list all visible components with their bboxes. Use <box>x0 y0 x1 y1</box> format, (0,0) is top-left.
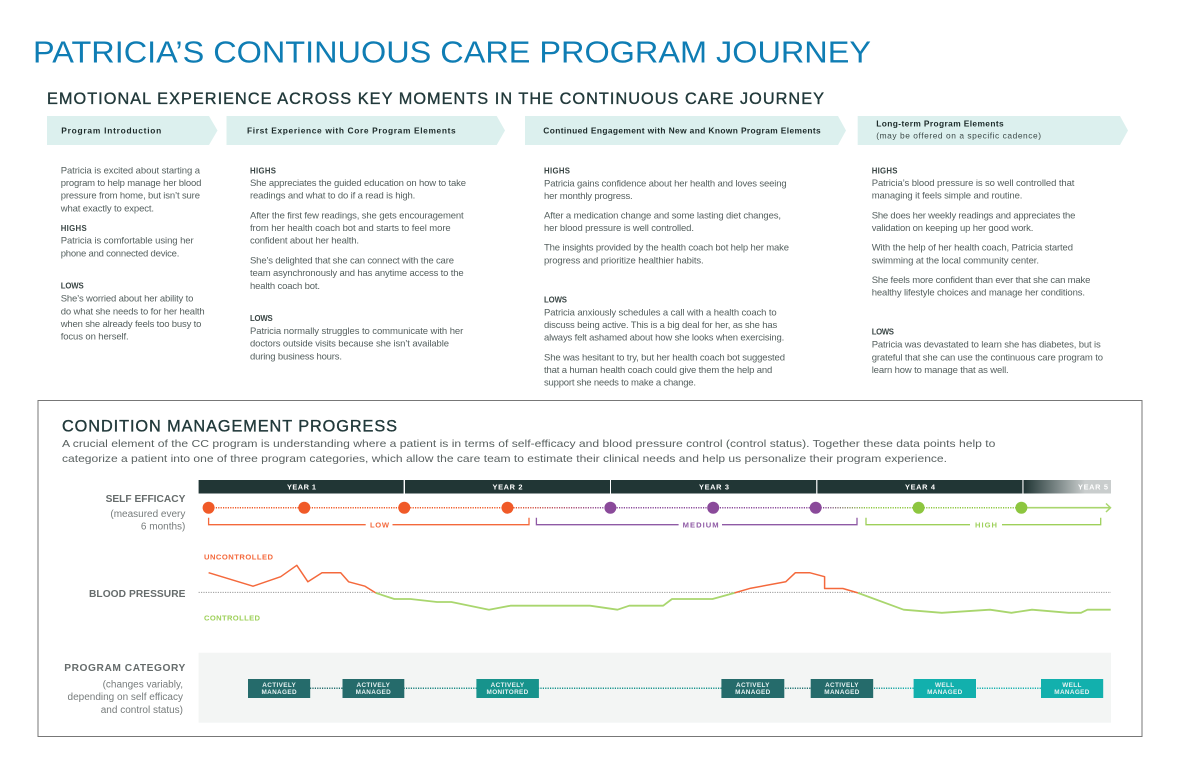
text column: long-term elements: managing it feels simple and routine. <box>872 191 1022 202</box>
panel description: categorize a patient into one of three program categories, which allow the care team to estimate their clinical needs and help us personalize their program experience. <box>62 454 947 465</box>
text column: long-term elements: She feels more confident than ever that she can make <box>872 275 1090 286</box>
text column: long-term elements: HIGHS <box>872 166 897 175</box>
box: well managed: MANAGED <box>1054 689 1090 696</box>
text column: long-term elements: She does her weekly readings and appreciates the <box>872 210 1075 221</box>
text column: continued engagement: The insights provided by the health coach bot help her make <box>544 243 789 254</box>
text column: continued engagement: her monthly progress. <box>544 191 633 202</box>
text column: long-term elements: healthy lifestyle choices and manage her conditions. <box>872 288 1085 299</box>
box: actively managed: ACTIVELY <box>825 682 859 689</box>
text column: program introduction: program to help manage her blood <box>61 178 201 189</box>
text column: long-term elements: learn how to manage that as well. <box>872 365 1009 376</box>
text column: first experience: readings and what to do if a read is high. <box>250 191 415 202</box>
text column: continued engagement: progress and prioritize healthier habits. <box>544 256 704 267</box>
text column: continued engagement: Patricia anxiously schedules a call with a health coach to <box>544 307 777 318</box>
text column: program introduction: pressure from home, but isn’t sure <box>61 191 200 202</box>
box: actively managed: MANAGED <box>824 689 860 696</box>
label: self efficacy <box>106 494 186 532</box>
text column: first experience: confident about her health. <box>250 236 359 247</box>
chevron: first experience: First Experience with Core Program Elements <box>247 125 456 135</box>
label: controlled: CONTROLLED <box>204 614 261 623</box>
box: actively managed: ACTIVELY <box>262 682 296 689</box>
box: actively managed: MANAGED <box>356 689 391 696</box>
text column: first experience: Patricia normally struggles to communicate with her <box>250 326 463 337</box>
text column: long-term elements: LOWS <box>872 328 894 337</box>
text column: program introduction: when she already feels too busy to <box>60 319 201 330</box>
text column: continued engagement: her blood pressure is well controlled. <box>544 223 694 234</box>
bracket: low: LOW <box>370 520 390 529</box>
text column: long-term elements: Patricia was devastated to learn she has diabetes, but is <box>872 340 1101 351</box>
chevron: continued engagement <box>525 116 846 145</box>
text column: program introduction: She’s worried about her ability to <box>61 294 193 305</box>
label: uncontrolled: UNCONTROLLED <box>204 553 274 562</box>
text column: continued engagement: that a human health coach could give them the help and <box>544 365 772 376</box>
section heading: emotional experience: EMOTIONAL EXPERIENCE ACROSS KEY MOMENTS IN THE CONTINUOUS CARE JOURNEY <box>47 90 824 108</box>
box: actively managed: MANAGED <box>261 689 297 696</box>
bracket: high <box>866 518 1101 529</box>
text column: continued engagement: HIGHS <box>544 166 570 175</box>
year timeline bar: YEAR 1 <box>287 483 316 492</box>
label: program category: PROGRAM CATEGORY <box>64 663 186 674</box>
box: actively managed: ACTIVELY <box>356 682 391 689</box>
blood pressure chart <box>199 553 1111 623</box>
box: actively managed: MANAGED <box>735 689 771 696</box>
chevron: long-term elements <box>858 116 1128 145</box>
text column: first experience: After the first few readings, she gets encouragement <box>250 210 464 221</box>
bracket: high: HIGH <box>975 520 997 529</box>
text column: first experience: doctors outside visits because she isn’t available <box>250 339 449 350</box>
text column: continued engagement: always felt ashamed about how she looks when exercising. <box>544 333 784 344</box>
bracket: medium <box>536 518 857 529</box>
text column: continued engagement: support she needs to make a change. <box>544 378 696 389</box>
box: actively managed: ACTIVELY <box>736 682 770 689</box>
box: well managed: WELL <box>935 682 955 689</box>
self efficacy timeline <box>203 502 1111 514</box>
text column: first experience: during business hours. <box>250 352 342 363</box>
label: self efficacy: 6 months) <box>141 521 185 532</box>
text column: first experience: health coach bot. <box>250 281 320 292</box>
box: well managed: WELL <box>1062 682 1082 689</box>
title: PATRICIA’S CONTINUOUS CARE PROGRAM JOURNEY <box>33 35 871 70</box>
text column: long-term elements: swimming at the local community center. <box>872 256 1039 267</box>
box: actively monitored <box>476 679 539 698</box>
box: well managed <box>1041 679 1103 698</box>
label: self efficacy: SELF EFFICACY <box>106 494 186 505</box>
panel: condition management progress <box>38 400 1142 736</box>
chevron: program introduction: Program Introduction <box>61 125 161 135</box>
text column: program introduction: focus on herself. <box>61 332 129 343</box>
text column: continued engagement: After a medication change and some lasting diet changes, <box>544 210 781 221</box>
box: actively managed <box>721 679 784 698</box>
text column: program introduction: what exactly to expect. <box>60 204 154 215</box>
text column: program introduction <box>60 165 205 343</box>
year timeline bar <box>199 480 1111 494</box>
label: program category: and control status) <box>101 705 183 716</box>
text column: long-term elements <box>872 166 1103 376</box>
text column: first experience: from her health coach bot and starts to feel more <box>250 223 451 234</box>
box: actively managed <box>811 679 873 698</box>
text column: long-term elements: Patricia’s blood pressure is so well controlled that <box>872 178 1075 189</box>
text column: continued engagement: LOWS <box>544 296 567 305</box>
box: actively monitored: ACTIVELY <box>491 682 525 689</box>
panel description <box>62 439 996 465</box>
chevron: long-term elements: (may be offered on a specific cadence) <box>876 130 1041 140</box>
text column: first experience: HIGHS <box>250 166 276 175</box>
text column: program introduction: LOWS <box>61 282 84 291</box>
chevron: program introduction <box>47 116 218 145</box>
text column: long-term elements: grateful that she can use the continuous care program to <box>872 352 1103 363</box>
box: actively managed <box>342 679 404 698</box>
label: program category: (changes variably, <box>103 679 183 690</box>
box: well managed <box>914 679 976 698</box>
chevron: long-term elements: Long-term Program Elements <box>876 119 1004 129</box>
text column: program introduction: do what she needs to for her health <box>61 306 205 317</box>
year timeline bar: YEAR 5 <box>1078 483 1108 492</box>
text column: continued engagement <box>544 166 789 389</box>
chevron: continued engagement: Continued Engagement with New and Known Program Elements <box>543 125 821 135</box>
text column: continued engagement: She was hesitant to try, but her health coach bot suggested <box>544 352 785 363</box>
year timeline bar: YEAR 4 <box>905 483 936 492</box>
year timeline bar: YEAR 2 <box>492 483 522 492</box>
box: well managed: MANAGED <box>927 689 963 696</box>
panel heading: CONDITION MANAGEMENT PROGRESS <box>62 418 397 436</box>
box: actively managed <box>248 679 310 698</box>
text column: long-term elements: With the help of her health coach, Patricia started <box>872 243 1073 254</box>
text column: continued engagement: Patricia gains confidence about her health and loves seeing <box>544 178 787 189</box>
text column: first experience: She appreciates the guided education on how to take <box>250 178 466 189</box>
text column: program introduction: phone and connected device. <box>61 249 179 260</box>
label: blood pressure: BLOOD PRESSURE <box>89 589 186 600</box>
year timeline bar: YEAR 3 <box>699 483 729 492</box>
text column: first experience: She’s delighted that she can connect with the care <box>250 255 454 266</box>
text column: continued engagement: discuss being active. This is a big deal for her, as she has <box>544 320 778 331</box>
program category track <box>199 653 1111 723</box>
text column: first experience: LOWS <box>250 314 273 323</box>
text column: program introduction: HIGHS <box>61 224 87 233</box>
panel description: A crucial element of the CC program is understanding where a patient is in terms of self-efficacy and blood pressure control (control status). Together these data points help to <box>62 439 996 450</box>
box: actively monitored: MONITORED <box>487 689 529 696</box>
text column: long-term elements: validation on keeping up her good work. <box>872 223 1033 234</box>
text column: program introduction: Patricia is comfortable using her <box>61 236 194 247</box>
label: self efficacy: (measured every <box>110 509 185 520</box>
bracket: medium: MEDIUM <box>683 520 719 529</box>
text column: program introduction: Patricia is excited about starting a <box>61 165 201 176</box>
chevron: first experience <box>226 116 505 145</box>
text column: first experience: team asynchronously and has anytime access to the <box>250 268 464 279</box>
text column: first experience <box>250 166 466 363</box>
label: program category <box>64 663 186 716</box>
label: program category: depending on self efficacy <box>68 692 183 703</box>
bracket: low <box>209 518 529 529</box>
